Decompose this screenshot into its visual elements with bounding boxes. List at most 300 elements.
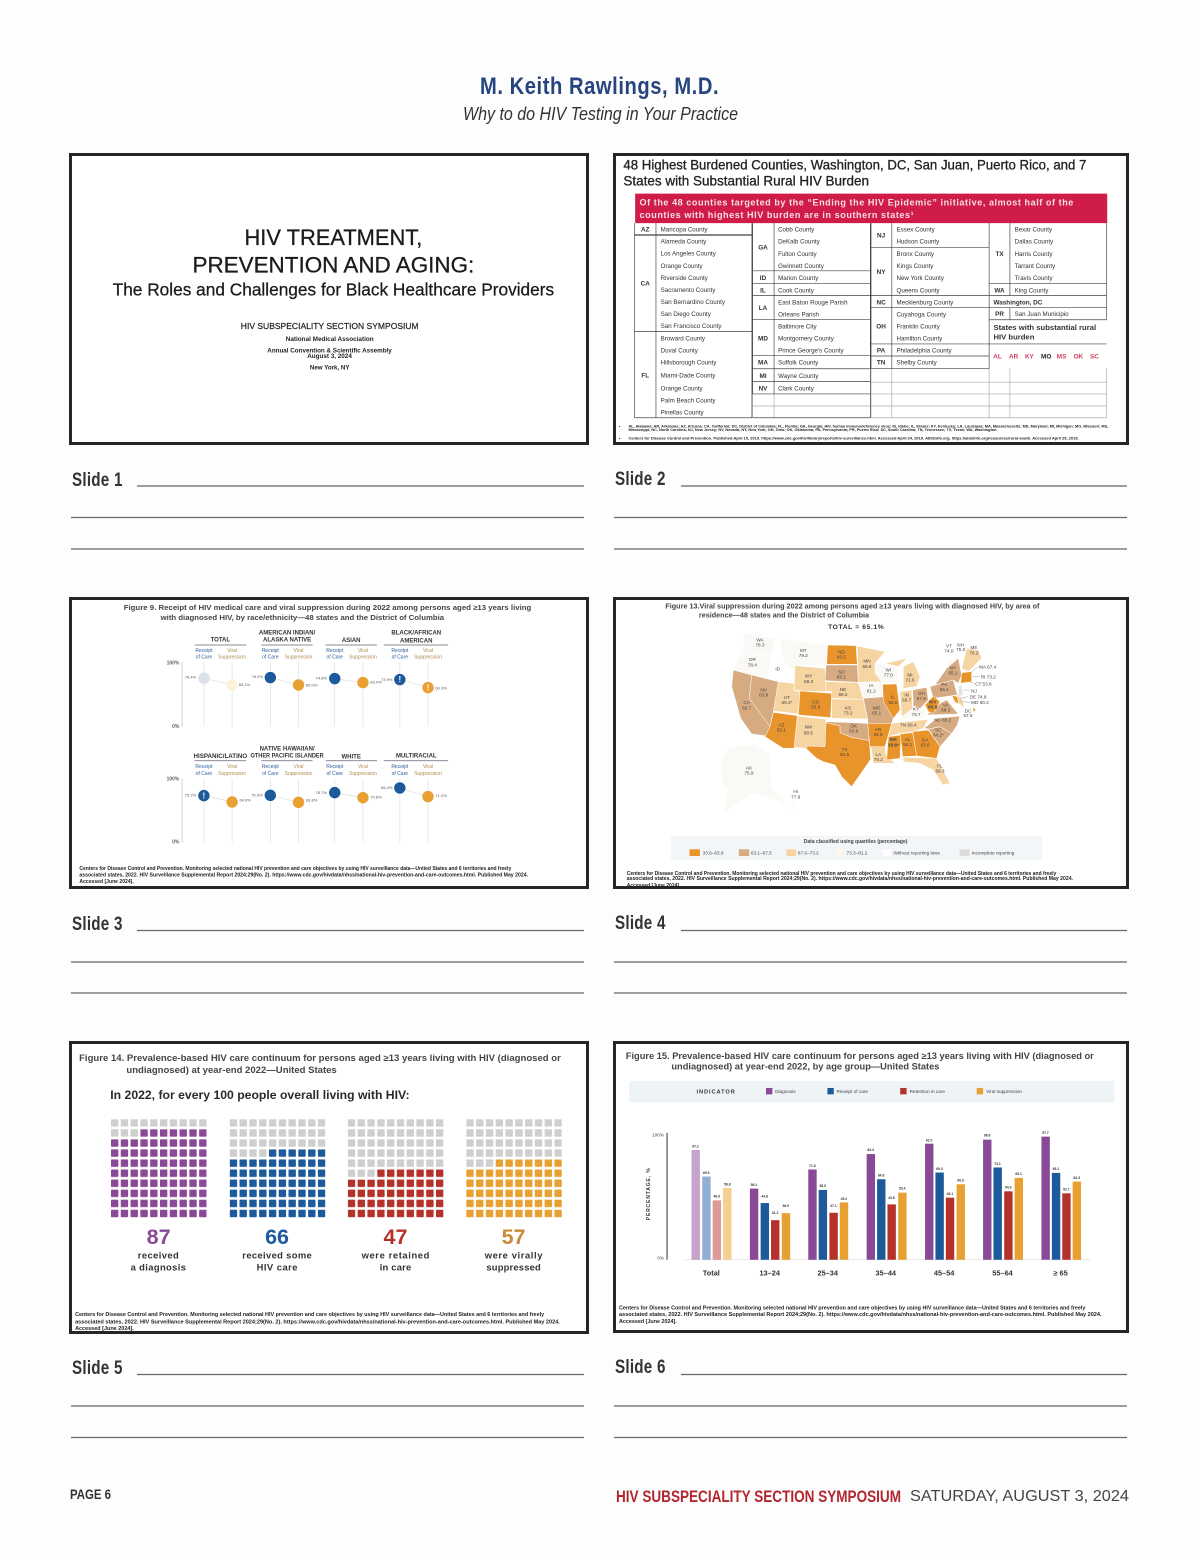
state labels: NM: [805, 725, 812, 730]
state labels: HI: [793, 789, 798, 794]
table column 3: NJ to TN: TN: [877, 360, 886, 367]
state labels: [742, 638, 997, 799]
slide 3 citation: [79, 866, 528, 885]
state labels: IA: [869, 683, 874, 688]
county table grid: [634, 223, 1107, 418]
state labels: LA: [875, 752, 881, 757]
red callout banner: counties with highest HIV burden are in southern states¹: [640, 210, 914, 220]
waffle: 57 were virally suppressed: suppressed: [486, 1261, 541, 1272]
bars: 35-44: 64.8: [878, 1174, 884, 1178]
table column 3: NJ to TN: OH: [876, 323, 886, 330]
bars: 55-64: 73.1: [994, 1162, 1001, 1166]
lollipop markers and values, bottom row: !: [203, 791, 205, 800]
state labels: 65.1: [940, 687, 949, 692]
state labels: AR: [875, 727, 881, 732]
bars: 13-24: 44.8: [761, 1194, 768, 1198]
slide 6 citation: [619, 1305, 1102, 1325]
map legend: 63.1–67.5: [751, 851, 772, 856]
state labels: MO: [873, 705, 880, 710]
state labels: MI: [907, 673, 913, 678]
slide 3 notes: [71, 912, 584, 993]
indicator sub-labels: Receipt: [391, 764, 409, 770]
state labels: 65.1: [872, 711, 882, 716]
state labels: 68.3: [941, 707, 951, 712]
bars: Total: [692, 1144, 731, 1278]
state labels: NH: [957, 642, 964, 647]
state labels: 81.2: [867, 688, 876, 693]
table column 3: NJ to TN: Cuyahoga County: [897, 311, 947, 318]
group headers, top row: BLACK/AFRICAN: [391, 631, 441, 637]
bars: 35-44: [867, 1148, 907, 1278]
lollipop markers and values, bottom row: 71.2%: [435, 793, 447, 798]
bars: 35-44: 84.3: [867, 1148, 874, 1152]
state labels: CT 53.8: [975, 681, 992, 686]
states with rural HIV burden: MO: [1041, 354, 1051, 361]
slide 1 event details: Annual Convention & Scientific Assembly: [267, 347, 392, 354]
table column 2: GA to NV: Gwinnett County: [778, 263, 825, 270]
slide 5 notes: Slide 5: [72, 1356, 123, 1378]
state labels: 62.9: [873, 732, 883, 737]
group headers, bottom row: WHITE: [341, 754, 361, 760]
state labels: AK: [746, 766, 752, 771]
table column 1: AZ, CA, FL: Miami-Dade County: [661, 372, 716, 379]
indicator sub-labels: Receipt: [326, 648, 344, 654]
slide 4 heading: Figure 13.Viral suppression during 2022 among persons aged ≥13 years living with diagnosed HIV, by area of: [665, 604, 1040, 611]
state labels: NY: [950, 666, 956, 671]
slide 6 notes: [614, 1355, 1127, 1438]
slide 1 event details: [241, 321, 419, 371]
bar chart legend: Diagnosis: [775, 1089, 796, 1094]
bars: 45-54: 92.0: [926, 1138, 932, 1142]
state labels: 61.5: [840, 752, 850, 757]
state labels: SC: [935, 728, 942, 733]
slide 2 notes: [614, 467, 1127, 549]
indicator sub-labels: of Care: [327, 655, 343, 661]
slide 3 heading: [124, 603, 532, 622]
slide 4 notes: [614, 911, 1127, 993]
slide 2 heading: [623, 157, 1086, 189]
state labels: 64.2*: [933, 733, 944, 738]
slide 4 heading: [665, 604, 1040, 619]
slide 6 heading: undiagnosed) at year-end 2022, by age group—United States: [671, 1062, 940, 1072]
footer: date: SATURDAY, AUGUST 3, 2024: [910, 1488, 1129, 1505]
table column 3: NJ to TN: NY: [877, 269, 886, 276]
state labels: 74.0: [944, 648, 954, 653]
waffle: 57 were virally suppressed: were virally: [484, 1250, 543, 1261]
state labels: NJ: [971, 688, 977, 693]
slide 3 citation: associated states, 2022. HIV Surveillance Supplemental Report 2024;29(No. 2). https://www.cdc.gov/hivdata/nhss/national-hiv-prevention-and-care-outcomes.html. Published May 2024.: [79, 872, 528, 878]
bars: Total: 65.9: [703, 1171, 710, 1175]
lollipop markers and values, bottom row: 75.9%: [251, 792, 263, 797]
bars: 35-44: 53.4: [899, 1186, 906, 1190]
slide 1 event details: August 3, 2024: [307, 353, 352, 360]
waffle: 57 were virally suppressed: [466, 1119, 562, 1272]
lollipop markers and values, bottom row: 64.9%: [239, 798, 251, 803]
slide 5 citation: Accessed [June 2024].: [75, 1326, 134, 1332]
lollipop markers and values, top row: 65.0%: [306, 682, 318, 687]
state labels: 63.8: [759, 693, 769, 698]
table column 1: AZ, CA, FL: Broward County: [661, 336, 706, 343]
slide 2 notes: Slide 2: [615, 467, 665, 489]
state labels: AL: [905, 737, 911, 742]
bars: 13-24: 36.9: [783, 1204, 789, 1208]
bars: 13-24: 31.2: [772, 1211, 778, 1215]
slide 4 heading: residence—48 states and the District of Columbia: [699, 612, 869, 619]
state labels: TX: [842, 747, 848, 752]
lollipop markers and values, top row: [185, 672, 447, 693]
slide 2 footnotes: AL, Alabama; AR, Arkansas; AZ, Arizona; CA, California; DC, District of Columbia; FL, Florida; GA, Georgia; HIV, human immunodeficiency virus; ID, Idaho; IL, Illinois; KY, Kentucky; LA, Louisiana; MA, Massachusetts; MD, Maryland; MI, Michigan; MO, Missouri; MS,: [628, 423, 1108, 428]
lollipop markers and values, bottom row: 78.7%: [316, 790, 327, 795]
table column 1: AZ, CA, FL: Palm Beach County: [661, 397, 716, 404]
indicator sub-labels: of Care: [392, 655, 408, 661]
state labels: DC: [965, 708, 971, 713]
state labels: 55.1: [777, 728, 786, 733]
lollipop markers and values, top row: !: [398, 675, 401, 684]
state labels: NE: [840, 687, 846, 692]
chart axes: 100%: [167, 777, 180, 783]
table column 3: NJ to TN: Kings County: [897, 263, 934, 270]
slide 6 citation: associated states, 2022. HIV Surveillance Supplemental Report 2024;29(No. 2). https://www.cdc.gov/hivdata/nhss/national-hiv-prevention-and-care-outcomes.html. Published May 2024.: [619, 1312, 1102, 1318]
table column 3: NJ to TN: Hudson County: [897, 239, 940, 246]
slide 4 citation: [627, 871, 1073, 889]
table column 1: AZ, CA, FL: Los Angeles County: [661, 251, 717, 258]
slide 4 citation: associated states, 2022. HIV Surveillance Supplemental Report 2024;29(No. 2). https://www.cdc.gov/hivdata/nhss/national-hiv-prevention-and-care-outcomes.html. Published May 2024.: [627, 876, 1073, 882]
group headers, bottom row: MULTIRACIAL: [396, 753, 437, 759]
table column 2: GA to NV: MA: [758, 360, 768, 367]
state labels: 54.1: [903, 742, 913, 747]
slide 1 event details: HIV SUBSPECIALITY SECTION SYMPOSIUM: [241, 321, 419, 331]
table column 1: AZ, CA, FL: Orange County: [661, 263, 704, 270]
indicator sub-labels: Receipt: [262, 764, 279, 770]
states with rural HIV burden: KY: [1025, 354, 1035, 361]
state labels: IN: [904, 693, 909, 698]
lollipop markers and values, bottom row: 75.2%: [185, 792, 197, 797]
table column 4: TX, WA, DC, PR: San Juan Municipio: [1015, 311, 1069, 318]
slide 2 footnotes: Mississippi; NC, North Carolina; NJ, New Jersey; NV, Nevada; NY, New York; OH, Ohio; OK, Oklahoma; PA, Pennsylvania; PR, Puerto Rico; SC, South Carolina; TN, Tennessee; TX, Texas; WA, Washington.: [628, 427, 998, 432]
map legend: Incomplete reporting: [972, 851, 1015, 856]
state labels: 75.0: [956, 647, 966, 652]
state labels: 66.7: [742, 705, 752, 710]
waffle: 66 received some HIV care: HIV care: [257, 1261, 298, 1272]
table column 3: NJ to TN: Mecklenburg County: [897, 299, 954, 306]
bars: 65 and older: 97.7: [1042, 1131, 1049, 1135]
bar chart legend: INDICATOR: [697, 1089, 735, 1095]
table column 1: AZ, CA, FL: CA: [641, 281, 650, 288]
waffle: 87 received a diagnosis: 87: [147, 1225, 171, 1249]
state labels: RI 73.2: [981, 674, 996, 679]
panel: slide 5 waffle charts: [70, 1042, 588, 1332]
table column 3: NJ to TN: Hamilton County: [897, 336, 943, 343]
bars: 35-44: 43.6: [888, 1196, 895, 1200]
table column 3: NJ to TN: Franklin County: [897, 323, 941, 330]
waffle: 87 received a diagnosis: a diagnosis: [131, 1261, 186, 1272]
indicator sub-labels: of Care: [392, 771, 408, 777]
table column 2: GA to NV: MD: [758, 336, 768, 343]
header: speaker name: M. Keith Rawlings, M.D.: [480, 72, 719, 99]
lollipop markers and values, top row: !: [427, 683, 429, 692]
state labels: 72.6: [905, 678, 915, 683]
state labels: FL: [937, 764, 943, 769]
state labels: WV: [929, 700, 936, 705]
bar chart legend: Retention in care: [910, 1089, 945, 1094]
group headers, top row: ALASKA NATIVE: [263, 638, 311, 644]
indicator sub-labels: of Care: [327, 771, 343, 777]
table column 1: AZ, CA, FL: Sacramento County: [661, 287, 716, 294]
waffle: 57 were virally suppressed: 57: [502, 1225, 526, 1249]
states with rural HIV burden: MS: [1057, 354, 1066, 361]
indicator sub-labels: Receipt: [326, 764, 344, 770]
table column 2: GA to NV: Fulton County: [778, 251, 818, 258]
map legend: 33.6–63.0: [703, 851, 724, 856]
slide 6 heading: Figure 15. Prevalence-based HIV care continuum for persons aged ≥13 years living with HIV (diagnosed or: [626, 1051, 1094, 1061]
table column 2: GA to NV: Baltimore City: [778, 323, 818, 330]
slide 1 main heading: HIV TREATMENT,: [244, 225, 422, 250]
state labels: MN: [863, 659, 871, 664]
state labels: NV: [760, 688, 767, 693]
bars: 13-24: 13–24: [759, 1269, 781, 1278]
table column 4: TX, WA, DC, PR: WA: [994, 287, 1005, 294]
table column 3: NJ to TN: Queens County: [897, 287, 940, 294]
state labels: 77.0: [884, 673, 893, 678]
indicator sub-labels: Receipt: [262, 648, 279, 654]
slide 5 citation: [75, 1312, 560, 1332]
state labels: 55.5: [811, 705, 821, 710]
slide 6 citation: Accessed [June 2024].: [619, 1319, 677, 1325]
indicator sub-labels: Suppression: [285, 655, 313, 661]
table column 4: TX, WA, DC, PR: [993, 227, 1069, 318]
states with rural HIV burden: AR: [1009, 354, 1019, 361]
chart axes: [167, 660, 182, 846]
map legend: [671, 836, 1042, 860]
table column 2: GA to NV: DeKalb County: [778, 239, 821, 246]
state labels: 75.9: [744, 770, 754, 775]
bars: 55-64: 96.6: [984, 1134, 990, 1138]
state labels: 63.0: [920, 742, 930, 747]
table column 1: AZ, CA, FL: Maricopa County: [661, 227, 708, 234]
table column 2: GA to NV: ID: [760, 275, 767, 282]
table column 2: GA to NV: East Baton Rouge Parish: [778, 299, 848, 306]
chart axes: 100%: [167, 660, 180, 666]
slide 4 notes: Slide 4: [615, 911, 666, 933]
indicator sub-labels: Suppression: [414, 771, 442, 777]
table column 4: TX, WA, DC, PR: King County: [1015, 287, 1049, 294]
bars: 65 and older: 52.7: [1063, 1188, 1070, 1192]
state labels: GA: [922, 738, 928, 743]
slide 5 heading: [79, 1053, 562, 1075]
table column 1: AZ, CA, FL: Duval County: [661, 348, 699, 355]
slide 1 notes: [71, 468, 584, 549]
map legend: Without reporting laws: [893, 851, 941, 856]
state labels: 57.6: [963, 713, 973, 718]
bars: Total: 46.9: [713, 1195, 720, 1199]
table column 1: AZ, CA, FL: San Francisco County: [661, 323, 722, 330]
table column 2: GA to NV: Orleans Parish: [778, 311, 820, 318]
table column 2: GA to NV: Clark County: [778, 386, 815, 393]
state labels: IL: [891, 694, 895, 699]
table column 3: NJ to TN: [876, 227, 954, 367]
group headers, top row: ASIAN: [342, 638, 361, 644]
bars: Total: 56.8: [724, 1182, 731, 1186]
footer: symposium name: HIV SUBSPECIALITY SECTION SYMPOSIUM: [616, 1487, 901, 1506]
table column 2: GA to NV: Suffolk County: [778, 360, 819, 367]
panel: slide 1 title slide: [70, 154, 588, 444]
state labels: 79.2: [799, 653, 808, 658]
table column 3: NJ to TN: New York County: [897, 275, 945, 282]
bars: 65 and older: ≥ 65: [1053, 1269, 1068, 1278]
lollipop markers and values, bottom row: 85.4%: [381, 785, 393, 790]
chart axes: 0%: [172, 724, 180, 730]
state labels: 73.7: [911, 712, 921, 717]
state labels: OK: [850, 723, 857, 728]
slide 3 citation: Accessed [June 2024].: [79, 879, 134, 885]
table column 1: AZ, CA, FL: FL: [641, 372, 649, 379]
state labels: OR: [749, 657, 756, 662]
waffle: 66 received some HIV care: 66: [265, 1225, 289, 1249]
state labels: 63.6: [849, 729, 859, 734]
state labels: MA 67.4: [979, 664, 997, 669]
bar chart legend: Receipt of care: [836, 1089, 868, 1094]
map legend: Data classified using quartiles (percentage): [804, 839, 908, 845]
slide 5 notes: [71, 1356, 584, 1438]
indicator sub-labels: Viral: [227, 764, 237, 770]
state labels: ME: [971, 645, 977, 650]
bars: 55-64: 55–64: [992, 1269, 1014, 1278]
state labels: PA: [941, 682, 947, 687]
group headers, top row: AMERICAN INDIAN/: [259, 631, 316, 637]
indicator sub-labels: Viral: [423, 764, 433, 770]
table column 1: AZ, CA, FL: Alameda County: [661, 239, 707, 246]
bars: 13-24: [750, 1183, 790, 1278]
state labels: 76.2: [969, 650, 979, 655]
table column 2: GA to NV: [758, 227, 848, 393]
waffle: 66 received some HIV care: [230, 1119, 325, 1272]
states with rural HIV burden: States with substantial rural: [993, 323, 1096, 332]
group headers, bottom row: NATIVE HAWAIIAN/: [260, 746, 315, 752]
lollipop markers and values, top row: 60.3%: [435, 685, 447, 690]
table column 1: AZ, CA, FL: San Diego County: [661, 311, 712, 318]
state labels: OH: [918, 691, 925, 696]
slide 3 citation: Centers for Disease Control and Prevention. Monitoring selected national HIV prevention and care objectives by using HIV surveillance data—United States and 6 territories and freely: [79, 866, 512, 872]
slide 5 heading: undiagnosed) at year-end 2022—United States: [126, 1065, 337, 1075]
states with rural HIV burden: SC: [1090, 354, 1099, 361]
indicator sub-labels: Suppression: [218, 771, 246, 777]
bars: 45-54: [925, 1138, 965, 1278]
state labels: 67.5: [917, 696, 926, 701]
group headers, top row: [195, 631, 448, 761]
slide 2 footnotes: •: [619, 436, 621, 441]
state labels: MS: [890, 737, 897, 742]
US choropleth map with state labels: [720, 633, 997, 815]
indicator sub-labels: Viral: [294, 764, 303, 770]
red callout banner: [635, 194, 1107, 223]
map legend: 67.6–73.2: [798, 851, 819, 856]
bar chart axes: 0%: [657, 1255, 664, 1260]
state labels: 69.2: [838, 692, 848, 697]
lollipop markers and values, top row: 74.8%: [316, 676, 327, 681]
bars: 45-54: 45–54: [934, 1269, 955, 1278]
table column 2: GA to NV: Montgomery County: [778, 336, 835, 343]
state labels: 69.7: [902, 698, 912, 703]
slide 3 heading: with diagnosed HIV, by race/ethnicity—48 states and the District of Columbia: [160, 613, 445, 622]
state labels: VT: [946, 644, 952, 649]
slide 2 footnotes: Centers for Disease Control and Prevention. Published April 15, 2019. https://www.cdc.gov/hiv/library/reports/hiv-surveillance.html. Accessed April 24, 2019. AIDSinfo.org. https://aidsinfo.org/resources/rural-south. Accessed April 25, 2019.: [628, 436, 1079, 441]
state labels: 65.9: [928, 705, 938, 710]
indicator sub-labels: Suppression: [285, 771, 313, 777]
state labels: 65.1: [948, 671, 958, 676]
state labels: CO: [812, 700, 819, 705]
bars: Total: Total: [703, 1269, 720, 1278]
indicator sub-labels: Receipt: [391, 648, 409, 654]
state labels: WY: [805, 674, 812, 679]
slide 1 event details: National Medical Association: [286, 336, 374, 343]
table column 4: TX, WA, DC, PR: PR: [995, 311, 1004, 318]
state shapes: [720, 633, 982, 815]
state labels: VA: [943, 702, 949, 707]
lollipop markers and values, bottom row: [185, 782, 447, 808]
header: presentation subtitle: Why to do HIV Testing in Your Practice: [463, 104, 738, 124]
state labels: KY: [913, 707, 919, 712]
indicator sub-labels: Viral: [227, 648, 237, 654]
slide 1 notes: Slide 1: [72, 468, 123, 490]
waffle: 87 received a diagnosis: [111, 1119, 207, 1272]
state labels: 62.0: [888, 700, 898, 705]
table column 1: AZ, CA, FL: Orange County: [661, 386, 704, 393]
bars: 25-34: 71.6: [809, 1164, 816, 1168]
state labels: CA: [743, 700, 750, 705]
bars: 45-54: 69.3: [936, 1167, 943, 1171]
table column 2: GA to NV: GA: [758, 245, 768, 252]
table column 4: TX, WA, DC, PR: TX: [995, 251, 1004, 258]
bars: 65 and older: [1041, 1131, 1081, 1278]
table column 2: GA to NV: Wayne County: [778, 373, 819, 380]
indicator sub-labels: Viral: [423, 648, 433, 654]
state labels: WI: [885, 668, 891, 673]
bars: 45-54: 60.0: [957, 1179, 964, 1183]
state labels: AZ: [778, 723, 784, 728]
state labels: 69.6: [862, 664, 872, 669]
state labels: DE 74.9: [970, 694, 987, 699]
slide 3 notes: Slide 3: [72, 912, 122, 934]
group headers, bottom row: HISPANIC/LATINO: [193, 754, 247, 760]
bars: 55-64: 54.3: [1005, 1185, 1012, 1189]
table column 1: AZ, CA, FL: San Bernardino County: [661, 299, 726, 306]
slide 5 citation: Centers for Disease Control and Prevention. Monitoring selected national HIV prevention and care objectives by using HIV surveillance data—United States and 6 territories and freely: [75, 1312, 545, 1318]
bars: 25-34: 55.5: [819, 1184, 826, 1188]
bars: 55-64: 65.1: [1015, 1172, 1022, 1176]
waffle intro line: In 2022, for every 100 people overall living with HIV:: [110, 1088, 410, 1102]
slide 1 main heading: PREVENTION AND AGING:: [192, 252, 474, 277]
table column 1: AZ, CA, FL: Riverside County: [661, 275, 709, 282]
state labels: UT: [784, 695, 790, 700]
bars: 25-34: 37.1: [830, 1204, 837, 1208]
table column 4: TX, WA, DC, PR: Tarrant County: [1015, 263, 1056, 270]
slide 3 heading: Figure 9. Receipt of HIV medical care and viral suppression during 2022 among persons aged ≥13 years living: [124, 603, 532, 612]
slide 5 citation: associated states, 2022. HIV Surveillance Supplemental Report 2024;29(No. 2). https://www.cdc.gov/hivdata/nhss/national-hiv-prevention-and-care-outcomes.html. Published May 2024.: [75, 1319, 560, 1325]
state labels: MD 60.2: [971, 700, 989, 705]
state labels: ND: [838, 650, 845, 655]
indicator sub-labels: Viral: [358, 648, 368, 654]
indicator sub-labels: Receipt: [195, 764, 213, 770]
table column 3: NJ to TN: Philadelphia County: [897, 348, 952, 355]
state labels: 78.3: [755, 643, 765, 648]
table column 4: TX, WA, DC, PR: Bexar County: [1015, 227, 1053, 234]
indicator sub-labels: of Care: [196, 655, 212, 661]
indicator sub-labels: of Care: [196, 771, 212, 777]
states with rural HIV burden: AL: [993, 354, 1002, 361]
indicator sub-labels: Viral: [294, 648, 303, 654]
waffle: 87 received a diagnosis: received: [138, 1250, 179, 1261]
bar chart axes: PERCENTAGE, %: [646, 1168, 652, 1220]
